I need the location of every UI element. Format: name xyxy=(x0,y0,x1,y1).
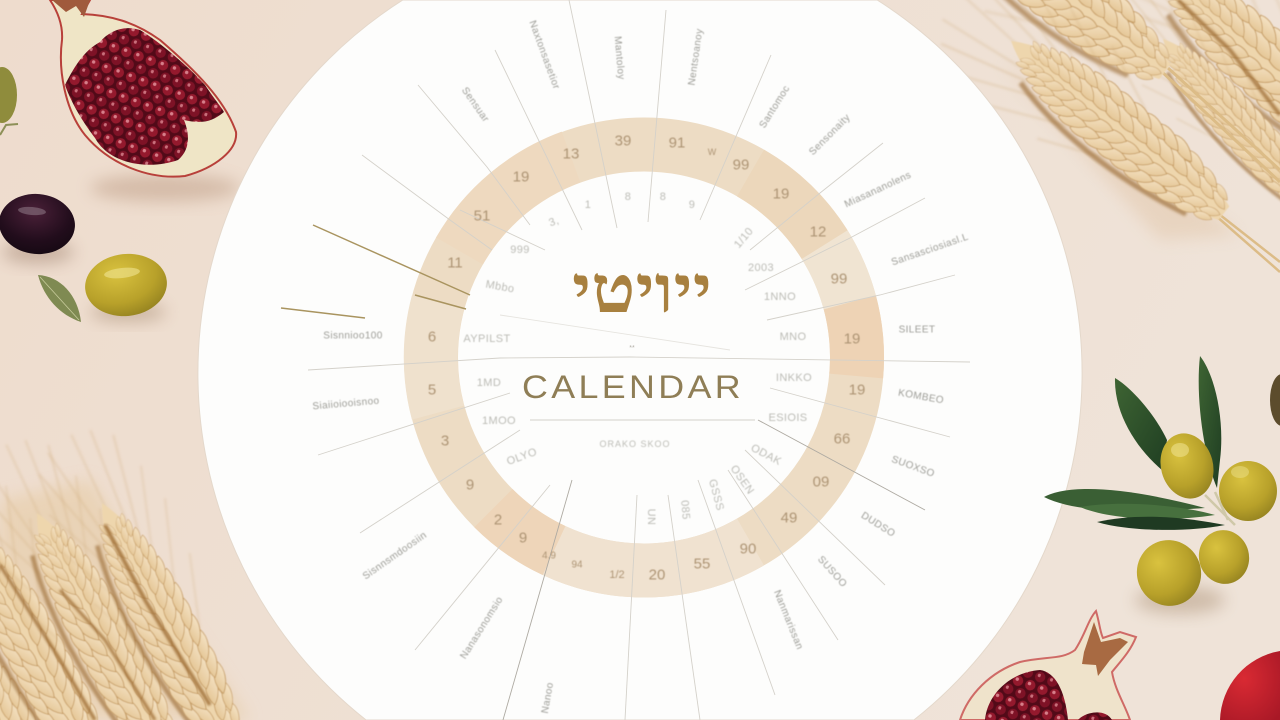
day numbers on ring: 39 xyxy=(615,132,631,150)
inner ring labels: UN xyxy=(645,509,657,525)
inner ring labels: 1NNO xyxy=(764,291,796,303)
inner ring labels: MNO xyxy=(780,331,806,343)
olive leaf: left xyxy=(38,275,81,322)
olive: partial dark at right edge xyxy=(1270,374,1280,426)
day numbers on ring: 13 xyxy=(563,146,579,162)
outer spoke labels: Sisnnioo100 xyxy=(323,330,383,342)
outer spoke labels: Mantoloy xyxy=(612,36,626,80)
inner ring labels: 8 xyxy=(625,191,631,203)
outer spoke labels: Santomoc xyxy=(758,84,792,130)
hebrew title: ייויטי xyxy=(572,254,712,327)
outer spoke labels: Sisnnsmdoosiin xyxy=(361,530,429,582)
inner ring labels: 2003 xyxy=(748,262,774,274)
day numbers on ring: 20 xyxy=(649,566,665,584)
calendar wheel: ring xyxy=(431,144,857,570)
day numbers on ring: 9 xyxy=(466,476,474,494)
olive: green left xyxy=(82,250,170,322)
day numbers on ring: 2 xyxy=(494,512,502,528)
day numbers on ring: 19 xyxy=(844,330,860,348)
inner ring labels: 3, xyxy=(547,215,561,229)
day numbers on ring xyxy=(428,132,865,584)
title: CALENDAR: CALENDAR xyxy=(522,369,744,405)
olive: dark xyxy=(0,191,77,264)
outer spoke labels: Nanoo xyxy=(540,682,556,714)
outer spoke labels: Sensonaity xyxy=(807,112,853,158)
inner ring labels: ODAK xyxy=(749,442,784,468)
inner ring labels: 1MD xyxy=(477,377,501,389)
day numbers on ring: 66 xyxy=(834,430,850,448)
day numbers on ring: 51 xyxy=(474,208,490,224)
day numbers on ring: W xyxy=(708,147,717,157)
outer spoke labels: Naxtonsasetior xyxy=(526,19,562,91)
outer spoke labels: SUOXSO xyxy=(890,454,936,480)
wheat: bottom left bundle xyxy=(0,410,287,720)
day numbers on ring: 99 xyxy=(733,156,749,174)
day numbers on ring: 09 xyxy=(813,474,829,490)
day numbers on ring: 4.9 xyxy=(542,550,556,562)
olives: right cluster xyxy=(1128,427,1277,615)
paper disc xyxy=(198,0,1082,720)
inner ring labels: 8 xyxy=(660,191,666,203)
outer spoke labels: KOMBEO xyxy=(897,388,945,406)
day numbers on ring: 5 xyxy=(428,382,436,398)
outer spoke labels: SILEET xyxy=(899,324,935,336)
day numbers on ring: 9 xyxy=(519,530,527,546)
pomegranate half: top left xyxy=(50,0,240,202)
inner ring labels xyxy=(463,191,812,525)
outer spoke labels: DUDSO xyxy=(859,510,897,540)
day numbers on ring: 11 xyxy=(447,254,463,272)
inner ring labels: ORAKO SKOO xyxy=(599,439,671,449)
inner ring labels: 085 xyxy=(678,500,692,520)
outer spoke labels: Sensuar xyxy=(459,85,491,125)
pomegranate half: bottom xyxy=(960,611,1136,720)
day numbers on ring: 19 xyxy=(773,186,789,202)
outer spoke labels: SUSOO xyxy=(815,554,849,590)
inner ring labels: AYPILST xyxy=(463,333,511,345)
inner ring labels: ESIOIS xyxy=(768,412,808,424)
outer spoke labels: Sansasciosiasl.L xyxy=(890,232,970,268)
inner ring labels: 1 xyxy=(585,199,591,211)
inner ring labels: GSSS xyxy=(706,478,726,512)
small dot above title: ** xyxy=(629,345,635,352)
inner ring labels: OSEN xyxy=(728,463,756,497)
spokes xyxy=(308,0,970,720)
day numbers on ring: 1/2 xyxy=(609,569,625,581)
day numbers on ring: 91 xyxy=(669,134,685,152)
day numbers on ring: 3 xyxy=(441,432,449,450)
day numbers on ring: 19 xyxy=(513,168,529,186)
day numbers on ring: 94 xyxy=(571,560,583,570)
day numbers on ring: 90 xyxy=(740,540,756,558)
olive: partial at left edge xyxy=(0,67,18,135)
inner ring labels: 9 xyxy=(689,199,695,211)
day numbers on ring: 6 xyxy=(428,328,436,346)
day numbers on ring: 55 xyxy=(694,556,710,572)
inner ring labels: 999 xyxy=(510,244,530,256)
outer spoke labels: Nanasonomsio xyxy=(458,595,506,661)
outer spoke labels: Miasananolens xyxy=(843,170,913,210)
day numbers on ring: 99 xyxy=(831,270,847,288)
olive branch: right leaves xyxy=(1044,356,1235,530)
wheat: top right bundle xyxy=(868,0,1280,272)
outer spoke labels xyxy=(312,19,970,714)
inner ring labels: OLYO xyxy=(505,446,539,468)
outer spoke labels: Siaiioiooisnoo xyxy=(312,396,380,412)
inner ring labels: 1MOO xyxy=(482,415,516,427)
day numbers on ring: 12 xyxy=(810,224,826,240)
day numbers on ring: 49 xyxy=(781,510,797,526)
inner ring labels: INKKO xyxy=(776,372,812,384)
day numbers on ring: 19 xyxy=(849,382,865,398)
dark accent spokes xyxy=(281,225,470,318)
inner ring labels: 1/10 xyxy=(732,225,756,251)
inner ring labels: Mbbo xyxy=(485,279,515,295)
red pomegranate: bottom right corner xyxy=(1220,651,1280,720)
outer spoke labels: Nentsoanoy xyxy=(687,28,705,86)
outer spoke labels: Nanmarissan xyxy=(771,589,805,651)
